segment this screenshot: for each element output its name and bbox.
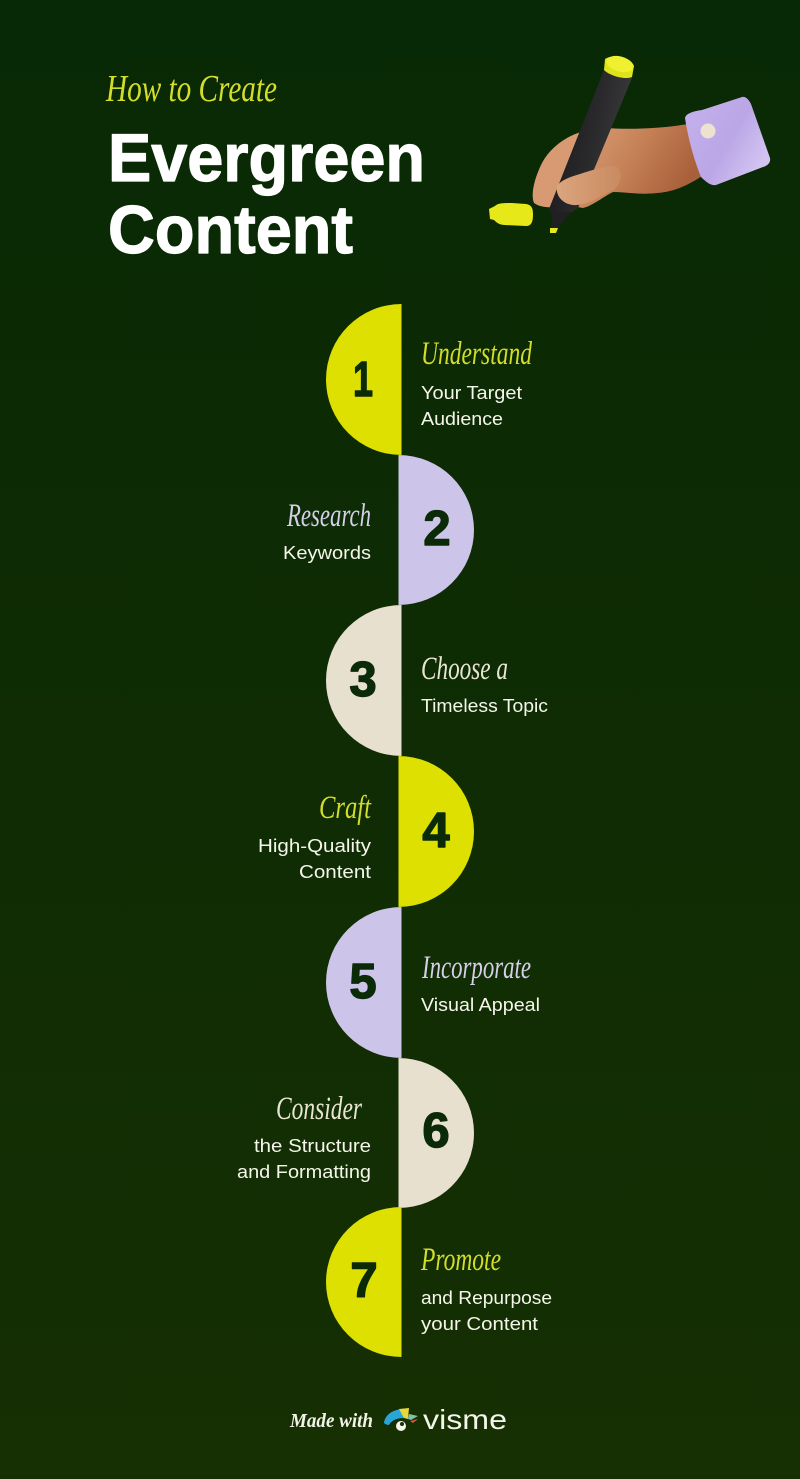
- step 7 heading: Promote: [420, 1242, 501, 1278]
- step 6: [237, 1058, 474, 1208]
- step 5 heading: Incorporate: [421, 950, 531, 986]
- step 3 text: Timeless Topic: [421, 695, 548, 716]
- icon: visme logo: [384, 1408, 418, 1431]
- cuff: [685, 97, 770, 185]
- step 7: [326, 1207, 552, 1357]
- step 1 text: Your Target: [421, 382, 522, 403]
- step 6 heading: Consider: [276, 1091, 362, 1127]
- step 6 text: [237, 1135, 371, 1182]
- step 7 text: your Content: [421, 1313, 538, 1334]
- marker tip: [552, 212, 571, 228]
- marker end cap: [604, 57, 634, 78]
- footer: made with visme: [289, 1404, 507, 1435]
- step 4 heading: Craft: [319, 790, 372, 826]
- step 1 text: Audience: [421, 408, 503, 429]
- step 2 heading: Research: [286, 498, 371, 534]
- number 2: 2: [423, 502, 451, 556]
- loose marker cap: [489, 203, 533, 226]
- illustration: hand holding marker: [489, 53, 770, 233]
- cuff button: [700, 124, 716, 138]
- step 4 text: [258, 835, 372, 882]
- number 3: 3: [349, 653, 377, 707]
- hand back: [533, 130, 600, 207]
- step 2: [283, 455, 474, 605]
- number 5: 5: [349, 955, 377, 1009]
- step 4 text: High-Quality: [258, 835, 372, 856]
- step 3: [326, 605, 548, 756]
- step 6 text: the Structure: [254, 1135, 371, 1156]
- step 4: [258, 756, 474, 907]
- step 4 text: Content: [299, 861, 371, 882]
- title: Content: [108, 192, 353, 268]
- number 4: 4: [422, 804, 450, 858]
- step 1 text: [421, 382, 522, 429]
- semicircle 7: [326, 1207, 402, 1357]
- step 1: [326, 304, 532, 455]
- marker body: [549, 70, 632, 214]
- step 1 heading: Understand: [421, 336, 532, 372]
- step 3 heading: Choose a: [421, 651, 508, 687]
- semicircle 6: [398, 1058, 474, 1208]
- step 7 text: and Repurpose: [421, 1287, 552, 1308]
- semicircle 2: [398, 455, 474, 605]
- title: Evergreen: [108, 120, 425, 196]
- semicircle 5: [326, 907, 402, 1058]
- hand palm: [572, 124, 702, 208]
- number 7: 7: [350, 1254, 378, 1308]
- number 1: 1: [353, 353, 373, 407]
- semicircle 1: [326, 304, 402, 455]
- step 2 text: Keywords: [283, 542, 371, 563]
- step 5: [326, 907, 540, 1058]
- step 6 text: and Formatting: [237, 1161, 371, 1182]
- made with label: Made with: [289, 1410, 373, 1432]
- thumb: [557, 166, 621, 205]
- semicircle 3: [326, 605, 402, 756]
- semicircle 4: [398, 756, 474, 907]
- title: [108, 120, 425, 268]
- number 6: 6: [422, 1104, 450, 1158]
- heading: how to create: How to Create: [105, 68, 277, 110]
- step 5 text: Visual Appeal: [421, 994, 540, 1015]
- visme wordmark: visme: [423, 1404, 507, 1435]
- step 7 text: [421, 1287, 552, 1334]
